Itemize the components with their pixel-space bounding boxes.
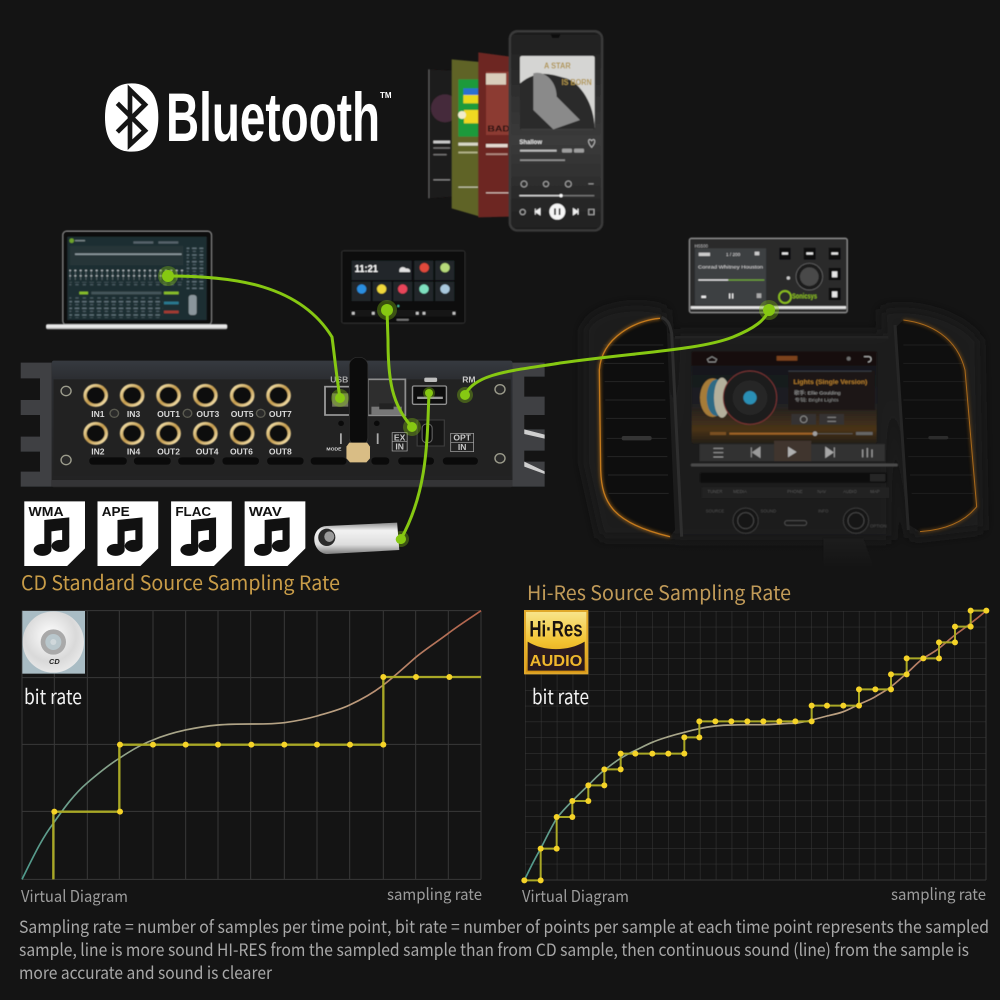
sampled step line — [524, 611, 986, 880]
icon: FLAC file: FLAC — [175, 503, 211, 519]
icon: CD — [22, 611, 85, 674]
connector labels: OUT4 — [196, 447, 219, 456]
laptop with tuning software — [46, 231, 227, 329]
centre infotainment screen — [692, 352, 877, 443]
sampled step line — [53, 677, 481, 879]
physical control panel: SOUND — [761, 509, 776, 514]
physical control panel: TUNER — [708, 489, 722, 494]
icon: FLAC file — [171, 501, 232, 566]
axis label: sampling rate: sampling rate — [891, 881, 986, 905]
album card: dark — [428, 69, 459, 198]
connector labels: OUT5 — [231, 409, 254, 419]
green connection cables — [168, 276, 769, 539]
sound wave curve — [524, 611, 986, 880]
USB-A port — [412, 378, 446, 404]
cable: head unit to EX IN — [387, 310, 412, 427]
vent slots — [89, 457, 478, 465]
amplifier rear panel — [21, 357, 545, 487]
USB-B port — [325, 375, 350, 415]
album card: red — [478, 52, 510, 217]
USB-B port: USB — [330, 375, 348, 384]
icon: APE file: APE — [102, 503, 130, 519]
audio format icons — [24, 501, 406, 566]
connector labels: OUT2 — [157, 447, 180, 456]
cable connection dots — [158, 266, 779, 547]
physical control panel: MAP — [870, 489, 880, 494]
optical port and labels — [392, 375, 476, 452]
left air vent — [599, 317, 682, 537]
HS500 remote controller: 1 / 200 — [726, 252, 741, 257]
icon: Hi-Res Audio badge — [525, 611, 587, 673]
physical control panel: AUDIO — [843, 489, 857, 494]
heat sink fins — [21, 363, 545, 487]
cable: RM to controller — [465, 310, 769, 395]
axis label: bit rate: bit rate — [532, 681, 589, 710]
heading: Bluetooth wordmark: TM — [380, 91, 392, 100]
connector labels: IN1 — [91, 409, 105, 419]
sample points — [521, 608, 989, 883]
optical port and labels: IN — [395, 442, 404, 452]
heading: CD standard: CD Standard Source Sampling Rate — [21, 567, 340, 596]
HS500 remote controller: HS500 — [695, 243, 708, 248]
cable: USB stick to USB port — [401, 393, 429, 539]
icon: WMA file — [24, 501, 85, 566]
RCA connectors — [85, 385, 289, 443]
icon: WAV file — [245, 501, 305, 566]
right air vent — [895, 320, 977, 532]
axis label: virtual diagram: Virtual Diagram — [522, 883, 629, 907]
axis label: sampling rate: sampling rate — [387, 881, 482, 905]
mounting screws — [61, 385, 505, 465]
physical control panel: PHONE — [787, 489, 803, 494]
optical port and labels: IN — [458, 442, 466, 452]
connector labels: OUT7 — [269, 409, 292, 419]
sound wave curve — [22, 611, 481, 879]
HS500 remote controller — [689, 238, 847, 313]
physical control panel: NAV — [817, 489, 826, 494]
antenna — [346, 357, 370, 462]
icon: WAV file: WAV — [249, 503, 283, 519]
physical control panel: MEDIA — [733, 489, 747, 494]
icon: Bluetooth logo — [105, 83, 158, 152]
head unit display — [342, 251, 465, 323]
axis label: bit rate: bit rate — [24, 681, 82, 710]
physical control panel: SOURCE — [706, 509, 724, 514]
explanatory text: more accurate and sound is clearer — [19, 959, 272, 984]
chart: CD sampling — [21, 611, 482, 907]
physical control panel: INFO — [818, 509, 829, 514]
ethernet port — [326, 379, 405, 453]
connector labels: IN2 — [91, 447, 105, 456]
centre infotainment screen: 歌手: Ellie Goulding — [794, 390, 841, 397]
centre infotainment screen: 专辑: Bright Lights — [795, 397, 839, 404]
phone body — [509, 30, 603, 232]
phone body: Shallow — [519, 139, 542, 146]
phone with album cards — [428, 30, 603, 232]
heading: Hi-Res: Hi-Res Source Sampling Rate — [527, 577, 791, 606]
icon: USB stick — [314, 523, 406, 554]
centre infotainment screen: Lights (Single Version) — [793, 379, 867, 386]
axis label: virtual diagram: Virtual Diagram — [21, 883, 128, 907]
icon: Hi-Res Audio badge: Hi·Res — [529, 617, 583, 642]
sample points — [51, 674, 452, 815]
ethernet port: MODE — [326, 447, 342, 453]
icon: APE file — [97, 501, 158, 566]
head unit display: 11:21 — [355, 264, 378, 275]
screen control bar — [691, 441, 898, 467]
icon: Hi-Res Audio badge: AUDIO — [530, 653, 582, 670]
album card: olive — [452, 59, 480, 217]
connector labels: IN3 — [127, 409, 141, 419]
connector labels: OUT6 — [230, 447, 253, 456]
explanatory text — [19, 913, 989, 984]
chart: Hi-Res sampling — [521, 608, 989, 907]
connector labels: OUT1 — [157, 409, 180, 419]
connector labels: OUT3 — [196, 409, 220, 419]
optical port and labels: EX — [394, 433, 406, 442]
optical port and labels: RM — [462, 375, 476, 384]
connector labels — [91, 409, 292, 456]
optical port and labels: OPT — [453, 433, 471, 443]
icon: CD: CD — [49, 657, 60, 666]
album card: red: BAD — [487, 124, 510, 134]
phone body: IS BORN — [562, 78, 592, 87]
connector labels: IN4 — [127, 447, 141, 456]
cable: laptop to USB — [168, 276, 340, 398]
car dashboard with centre screen — [580, 305, 997, 568]
physical control panel — [700, 473, 889, 567]
physical control panel: OPTION — [870, 523, 887, 528]
heading: Bluetooth wordmark: Bluetooth — [166, 79, 380, 156]
phone body: A STAR — [544, 60, 571, 70]
connector labels: OUT8 — [269, 447, 292, 456]
HS500 remote controller: Sonicsys — [792, 291, 817, 300]
icon: WMA file: WMA — [29, 503, 64, 519]
HS500 remote controller: Conrad Whitney Houston — [698, 264, 764, 269]
